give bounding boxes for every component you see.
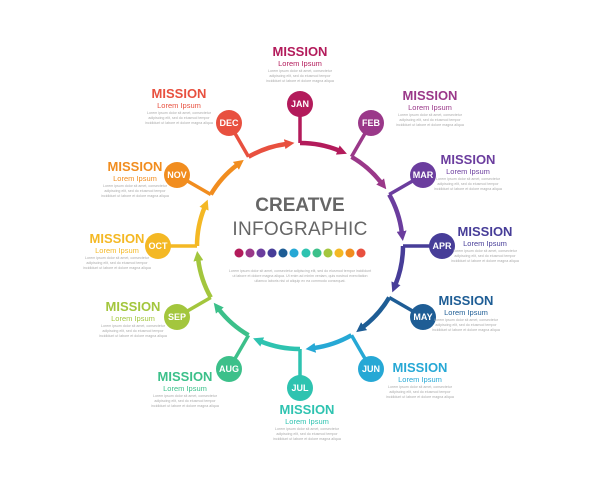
bubble: DEC: DEC bbox=[219, 118, 239, 128]
text: JAN: Lorem ipsum dolor sit amet, consectetur bbox=[268, 69, 332, 73]
text: JAN bbox=[266, 44, 334, 83]
bubble: MAY: MAY bbox=[413, 312, 433, 322]
bubble: JUN bbox=[358, 356, 384, 382]
text: JUN: Lorem ipsum dolor sit amet, consectetur bbox=[388, 385, 452, 389]
text: AUG: Lorem ipsum dolor sit amet, consectetur bbox=[153, 394, 217, 398]
text: OCT: Lorem ipsum dolor sit amet, consectetur bbox=[85, 256, 149, 260]
text: FEB: MISSION bbox=[403, 88, 457, 103]
text: NOV: Lorem ipsum dolor sit amet, consectetur bbox=[103, 184, 167, 188]
bubble: AUG: AUG bbox=[219, 364, 239, 374]
text: OCT: MISSION bbox=[90, 231, 144, 246]
text: JUL: incididunt ut labore et dolore magna aliqua bbox=[273, 437, 341, 441]
text: SEP: adipiscing elit, sed do eiusmod tempor bbox=[102, 329, 164, 333]
text: DEC: adipiscing elit, sed do eiusmod tempor bbox=[148, 116, 210, 120]
text: JAN: adipiscing elit, sed do eiusmod tempor bbox=[269, 74, 331, 78]
bubble: JUL bbox=[287, 375, 313, 401]
bubble: FEB: FEB bbox=[362, 118, 381, 128]
center body text: ut labore et dolore magna aliqua. Ut enim ad minim veniam, quis nostrud exercitation bbox=[232, 274, 368, 278]
text: APR: incididunt ut labore et dolore magna aliqua bbox=[451, 259, 519, 263]
bubble: JAN: JAN bbox=[291, 99, 309, 109]
text: JUL: adipiscing elit, sed do eiusmod tempor bbox=[276, 432, 338, 436]
text: SEP: Lorem Ipsum bbox=[111, 314, 155, 323]
text: AUG: MISSION bbox=[158, 369, 212, 384]
text: APR bbox=[451, 224, 519, 263]
bubble: JUN: JUN bbox=[362, 364, 380, 374]
bubble: DEC bbox=[216, 110, 242, 136]
center body text bbox=[229, 269, 372, 283]
bubble: APR: APR bbox=[432, 241, 452, 251]
bubble: SEP bbox=[164, 304, 190, 330]
text: OCT: incididunt ut labore et dolore magna aliqua bbox=[83, 266, 151, 270]
text: JAN: MISSION bbox=[273, 44, 327, 59]
text: FEB: incididunt ut labore et dolore magna aliqua bbox=[396, 123, 464, 127]
text: JUL: Lorem Ipsum bbox=[285, 417, 329, 426]
text: MAR: Lorem Ipsum bbox=[446, 167, 490, 176]
text: AUG: incididunt ut labore et dolore magna aliqua bbox=[151, 404, 219, 408]
text: JUN: incididunt ut labore et dolore magna aliqua bbox=[386, 395, 454, 399]
center title bbox=[232, 195, 368, 240]
text: JUN: Lorem Ipsum bbox=[398, 375, 442, 384]
text: JUL: Lorem ipsum dolor sit amet, consectetur bbox=[275, 427, 339, 431]
text: SEP: Lorem ipsum dolor sit amet, consectetur bbox=[101, 324, 165, 328]
text: APR: Lorem Ipsum bbox=[463, 239, 507, 248]
text: SEP: MISSION bbox=[106, 299, 160, 314]
center body text: Lorem ipsum dolor sit amet, consectetur adipiscing elit, sed do eiusmod tempor incididunt bbox=[229, 269, 371, 273]
bubble: OCT: OCT bbox=[148, 241, 168, 251]
text: APR: MISSION bbox=[458, 224, 512, 239]
bubble: JUL: JUL bbox=[291, 383, 309, 393]
text: MAY: incididunt ut labore et dolore magna aliqua bbox=[432, 328, 500, 332]
bubble: NOV: NOV bbox=[167, 170, 187, 180]
text: AUG: Lorem Ipsum bbox=[163, 384, 207, 393]
text: DEC: Lorem Ipsum bbox=[157, 101, 201, 110]
text: APR: Lorem ipsum dolor sit amet, consectetur bbox=[453, 249, 517, 253]
text: JAN: Lorem Ipsum bbox=[278, 59, 322, 68]
text: DEC: incididunt ut labore et dolore magna aliqua bbox=[145, 121, 213, 125]
text: AUG: adipiscing elit, sed do eiusmod tempor bbox=[154, 399, 216, 403]
text: JUN: MISSION bbox=[393, 360, 447, 375]
text: MAY: MISSION bbox=[439, 293, 493, 308]
text: FEB: adipiscing elit, sed do eiusmod tempor bbox=[399, 118, 461, 122]
text: MAR: Lorem ipsum dolor sit amet, consectetur bbox=[436, 177, 500, 181]
text: DEC bbox=[145, 86, 213, 125]
bubble: SEP: SEP bbox=[168, 312, 186, 322]
text: JUL bbox=[273, 402, 341, 441]
text: FEB bbox=[396, 88, 464, 127]
bubble: MAR: MAR bbox=[413, 170, 434, 180]
text: OCT: Lorem Ipsum bbox=[95, 246, 139, 255]
text: APR: adipiscing elit, sed do eiusmod tempor bbox=[454, 254, 516, 258]
text: SEP: incididunt ut labore et dolore magna aliqua bbox=[99, 334, 167, 338]
text: NOV: MISSION bbox=[108, 159, 162, 174]
text: NOV: Lorem Ipsum bbox=[113, 174, 157, 183]
text: MAY: Lorem Ipsum bbox=[444, 308, 488, 317]
bubble: APR bbox=[429, 233, 455, 259]
bubble: NOV bbox=[164, 162, 190, 188]
text: MAY: adipiscing elit, sed do eiusmod tempor bbox=[435, 323, 497, 327]
text: JUN: adipiscing elit, sed do eiusmod tempor bbox=[389, 390, 451, 394]
text: NOV: adipiscing elit, sed do eiusmod tempor bbox=[104, 189, 166, 193]
text: JAN: incididunt ut labore et dolore magna aliqua bbox=[266, 79, 334, 83]
bubble: AUG bbox=[216, 356, 242, 382]
bubble: OCT bbox=[145, 233, 171, 259]
text: MAR: incididunt ut labore et dolore magna aliqua bbox=[434, 187, 502, 191]
center title: INFOGRAPHIC bbox=[232, 219, 368, 240]
bubble: JAN bbox=[287, 91, 313, 117]
text: MAR: MISSION bbox=[441, 152, 495, 167]
text: DEC: MISSION bbox=[152, 86, 206, 101]
text: MAY: Lorem ipsum dolor sit amet, consectetur bbox=[434, 318, 498, 322]
text: JUN bbox=[386, 360, 454, 399]
center body text: ullamco laboris nisi ut aliquip ex ea commodo consequat. bbox=[255, 279, 345, 283]
text: OCT bbox=[83, 231, 151, 270]
center title: CREATVE bbox=[255, 195, 345, 216]
text: FEB: Lorem Ipsum bbox=[408, 103, 452, 112]
bubble: MAR bbox=[410, 162, 436, 188]
text: NOV: incididunt ut labore et dolore magna aliqua bbox=[101, 194, 169, 198]
text: MAY bbox=[432, 293, 500, 332]
text: OCT: adipiscing elit, sed do eiusmod tempor bbox=[86, 261, 148, 265]
text: FEB: Lorem ipsum dolor sit amet, consectetur bbox=[398, 113, 462, 117]
text: NOV bbox=[101, 159, 169, 198]
text: MAR: adipiscing elit, sed do eiusmod tempor bbox=[437, 182, 499, 186]
bubble: MAY bbox=[410, 304, 436, 330]
text: AUG bbox=[151, 369, 219, 408]
color dots bbox=[234, 248, 366, 258]
text: JUL: MISSION bbox=[280, 402, 334, 417]
text: SEP bbox=[99, 299, 167, 338]
bubble: FEB bbox=[358, 110, 384, 136]
text: DEC: Lorem ipsum dolor sit amet, consectetur bbox=[147, 111, 211, 115]
text: MAR bbox=[434, 152, 502, 191]
